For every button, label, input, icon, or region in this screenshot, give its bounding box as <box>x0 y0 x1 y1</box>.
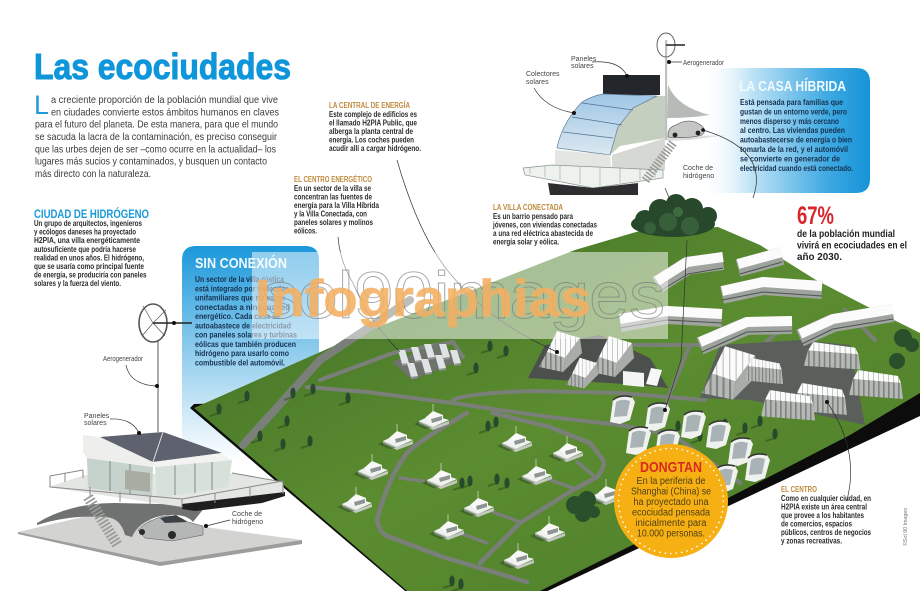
arched supports <box>37 503 205 537</box>
intro text: en ciudades convierte estos ámbitos humanos en claves <box>51 106 279 118</box>
solar field <box>392 343 462 380</box>
text block: sin conexión: unifamiliares que no están <box>195 292 285 302</box>
callout: casa híbrida labels: Paneles <box>571 56 597 63</box>
text block: el centro energético: EL CENTRO ENERGÉTICO <box>294 175 372 184</box>
text block: la casa híbrida: menos disperso y más cercano <box>740 116 839 126</box>
text block: la casa híbrida: al centro. Las viviendas pueden <box>740 125 845 135</box>
text block: la casa híbrida: se convierte en generador de <box>740 153 840 163</box>
watermark: Infographias <box>255 270 591 328</box>
callout: casa híbrida labels: Colectores <box>526 71 560 78</box>
leader lines: map <box>338 160 851 500</box>
text block: ciudad de hidrógeno: CIUDAD DE HIDRÓGENO <box>34 206 149 221</box>
text block: la casa híbrida: Está pensada para familias que <box>740 97 843 107</box>
glass walls <box>87 458 232 498</box>
badge: dongtan <box>614 444 728 558</box>
text block: el centro energético: En un sector de la villa se <box>294 184 371 193</box>
statistic: 67% <box>797 202 907 263</box>
text block: la villa conectada: energía solar y eólica. <box>493 238 559 246</box>
statistic: 67%: de la población mundial <box>797 229 895 240</box>
text block: ciudad de hidrógeno: Un grupo de arquitectos, ingenieros <box>34 219 142 228</box>
watermark: sol90images <box>262 258 665 332</box>
callout: lower house labels: Aerogenerador <box>103 356 144 363</box>
callout: casa híbrida labels: Aerogenerador <box>683 60 725 67</box>
stairs <box>88 497 118 546</box>
callout: casa híbrida labels: Coche de <box>683 165 713 172</box>
panel: la casa híbrida <box>700 68 870 193</box>
badge: dongtan: DONGTAN <box>640 459 702 476</box>
roads <box>243 300 875 582</box>
badge: dongtan: 10.000 personas. <box>637 528 705 540</box>
panel: sin conexión background <box>182 246 319 460</box>
text block: sin conexión: conectadas a ninguna red <box>195 302 290 312</box>
text block: la central de energía: Este complejo de edificios es <box>329 110 417 119</box>
illustration: hydrogen house with wind turbine <box>18 304 302 566</box>
callout: casa híbrida labels: solares <box>571 63 594 70</box>
text block: el centro energético: paneles solares y molinos <box>294 218 373 227</box>
text block: el centro energético <box>294 175 379 236</box>
text block: el centro: H2PIA existe un área central <box>781 502 867 512</box>
text block: la central de energía: energía. Los coches pueden <box>329 136 414 144</box>
text block: sin conexión: con paneles solares y turbinas <box>195 330 297 340</box>
callout: casa híbrida labels: solares <box>526 79 549 86</box>
badge: dongtan: ha proyectado una <box>634 497 709 508</box>
text block: sin conexión: Un sector de la villa rústica <box>195 274 284 284</box>
text block: la villa conectada: LA VILLA CONECTADA <box>493 203 563 212</box>
scattered trees <box>210 340 778 591</box>
text block: la central de energía: alberga la planta central de <box>329 127 413 136</box>
mast <box>157 340 159 432</box>
text block: sin conexión: está integrado por viviendas <box>195 283 289 293</box>
text block: el centro: EL CENTRO <box>781 485 817 494</box>
hydrogen car <box>138 515 203 541</box>
text block: la central de energía: acudir allí a cargar hidrógeno. <box>329 144 421 153</box>
text block: ciudad de hidrógeno: y ecólogos daneses ha proyectado <box>34 228 136 237</box>
icon: hydrogen car on casa híbrida <box>668 121 705 138</box>
wind turbine <box>139 304 192 342</box>
text block: el centro energético: y la Villa Conectada, con <box>294 210 367 218</box>
text block: la casa híbrida: tomarla de la red, y el automóvil <box>740 144 848 154</box>
text block: el centro energético: energía para la Villa Híbrida <box>294 201 379 210</box>
intro text: a creciente proporción de la población mundial que vive <box>51 94 278 106</box>
text block: la casa híbrida: electricidad cuando está conectado. <box>740 163 853 173</box>
statistic: 67%: año 2030. <box>797 252 842 263</box>
text block: la central de energía: LA CENTRAL DE ENERGÍA <box>329 101 410 110</box>
text block: ciudad de hidrógeno: H2PIA, una villa energéticamente <box>34 236 140 245</box>
roof <box>83 432 232 467</box>
text block: sin conexión <box>195 254 297 367</box>
callout: lower house labels: solares <box>84 420 107 427</box>
text block: ciudad de hidrógeno <box>34 206 149 288</box>
intro text: más directo con la naturaleza. <box>35 168 151 180</box>
text block: el centro: y zonas recreativas. <box>781 536 842 546</box>
text block: sin conexión: SIN CONEXIÓN <box>195 254 287 272</box>
text block: el centro: que provee a los habitantes <box>781 511 864 520</box>
text block: la villa conectada: a una red eléctrica abastecida de <box>493 229 593 238</box>
text block: la villa conectada: Es un barrio pensado para <box>493 212 573 221</box>
intro text <box>34 90 279 180</box>
text block: la central de energía: el llamado H2PIA Public, que <box>329 118 417 128</box>
callout: lower house labels <box>84 321 263 528</box>
intro text: que las urbes dejen de ser –como ocurre en la actualidad– los <box>35 143 276 155</box>
text block: el centro: Como en cualquier ciudad, en <box>781 494 871 503</box>
text block: sin conexión: hidrógeno para usarlo como <box>195 348 289 358</box>
text block: la villa conectada: jóvenes, con viviendas conectadas <box>492 220 597 230</box>
text block: la central de energía <box>329 101 421 153</box>
text block: sin conexión: combustible del automóvil. <box>195 357 285 367</box>
text block: el centro <box>781 485 871 546</box>
title: Las ecociudades <box>34 46 291 87</box>
text block: la casa híbrida: gustan de un entorno verde, pero <box>740 106 847 116</box>
tree cluster: hill <box>631 194 717 237</box>
callout: lower house labels: Coche de <box>232 511 262 518</box>
text block: el centro energético: concentran las fuentes de <box>294 192 372 202</box>
text block: la casa híbrida: autoabastecerse de energía o bien <box>740 135 852 145</box>
callout: casa híbrida labels: hidrógeno <box>683 173 714 180</box>
text block: ciudad de hidrógeno: realidad en unos años. El hidrógeno, <box>34 253 144 262</box>
central buildings <box>528 331 903 425</box>
small villas: villa híbrida <box>337 404 622 569</box>
text block: sin conexión: eólicas que también producen <box>195 339 296 349</box>
text block: ciudad de hidrógeno: de energía, se produciría con paneles <box>34 271 147 280</box>
text block: sin conexión: energético. Cada casa se <box>195 311 280 321</box>
callout: lower house labels: hidrógeno <box>232 519 263 526</box>
text block: la casa híbrida <box>739 78 853 173</box>
front rail <box>50 481 283 508</box>
text block: el centro energético: eólicos. <box>294 226 317 236</box>
illustration: green terrain map <box>190 194 920 591</box>
text block: la casa híbrida: LA CASA HÍBRIDA <box>739 78 846 95</box>
badge: dongtan: inicialmente para <box>636 518 707 529</box>
intro text: lugares más sucios y contaminados, y busquen un contacto <box>35 156 267 168</box>
base slab <box>18 513 302 566</box>
intro text: para el futuro del planeta. De esta manera, para que el mundo <box>35 119 278 131</box>
text block: ciudad de hidrógeno: que se usaría como principal fuente <box>34 262 144 271</box>
callout: casa híbrida labels <box>526 56 756 198</box>
arched houses: villa conectada <box>610 396 770 493</box>
statistic: 67%: 67% <box>797 202 834 230</box>
callout: lower house labels: Paneles <box>84 413 110 420</box>
illustration: casa híbrida building <box>523 33 727 195</box>
credit: ©Sol 90 Images <box>902 508 909 546</box>
deck <box>48 470 285 511</box>
text block: el centro: públicos, centros de negocios <box>781 528 871 537</box>
text block: la villa conectada <box>492 203 597 246</box>
badge: dongtan: En la periferia de <box>636 476 706 487</box>
badge: dongtan: Shanghai (China) se <box>631 486 711 498</box>
text block: sin conexión: autoabastece de electricidad <box>195 320 291 330</box>
winding residential blocks <box>620 252 893 352</box>
badge: dongtan: ecociudad pensada <box>632 508 710 518</box>
tree clusters: right and centre <box>566 329 919 522</box>
intro text: se sacuda la lacra de la contaminación, es preciso conseguir <box>35 131 277 143</box>
intro text: L <box>34 90 49 120</box>
text block: el centro: de comercios, espacios <box>781 520 852 528</box>
text block: ciudad de hidrógeno: solares y la fuerza del viento. <box>34 279 121 288</box>
text block: ciudad de hidrógeno: autosuficiente que podría hacerse <box>34 245 136 254</box>
